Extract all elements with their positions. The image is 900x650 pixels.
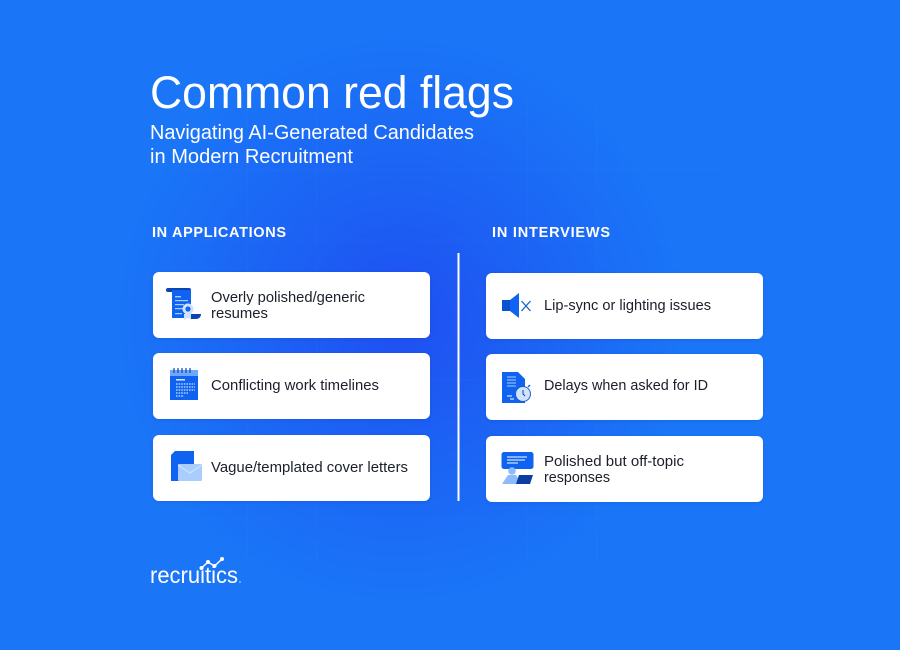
panel: interviews list <box>486 273 763 502</box>
heading: in interviews: IN INTERVIEWS <box>492 225 610 241</box>
subtitle: Navigating AI-Generated Candidates <box>150 122 474 144</box>
heading: in applications: IN APPLICATIONS <box>152 225 286 241</box>
card: lip-sync <box>486 273 763 339</box>
label: Polished but off-topic <box>544 454 684 470</box>
panel: applications list <box>153 272 430 501</box>
icon: calendar <box>170 368 198 400</box>
subtitle: in Modern Recruitment <box>150 146 353 168</box>
label <box>544 454 684 486</box>
label: Delays when asked for ID <box>544 378 708 394</box>
label: Vague/templated cover letters <box>211 460 408 476</box>
card: cover letters <box>153 435 430 501</box>
label: responses <box>544 470 610 486</box>
logo: recruitics: recruitics <box>150 562 238 588</box>
label <box>211 290 365 322</box>
label: resumes <box>211 306 268 322</box>
label: Lip-sync or lighting issues <box>544 298 711 314</box>
icon: speech bubble with person and laptop <box>502 452 534 484</box>
card: resumes <box>153 272 430 338</box>
icon: document with envelope <box>171 451 202 481</box>
card: ID delays <box>486 354 763 420</box>
card: timelines <box>153 353 430 419</box>
title: Common red flags <box>150 67 514 118</box>
label: Conflicting work timelines <box>211 378 379 394</box>
icon: muted speaker <box>502 293 530 318</box>
icon: resume scroll with rosette <box>166 288 201 320</box>
icon: logo trend line <box>200 557 224 570</box>
icon: document with stopwatch <box>502 372 530 403</box>
column divider <box>458 253 460 501</box>
label: Overly polished/generic <box>211 290 365 306</box>
subtitle <box>150 122 474 168</box>
card: off-topic responses <box>486 436 763 502</box>
